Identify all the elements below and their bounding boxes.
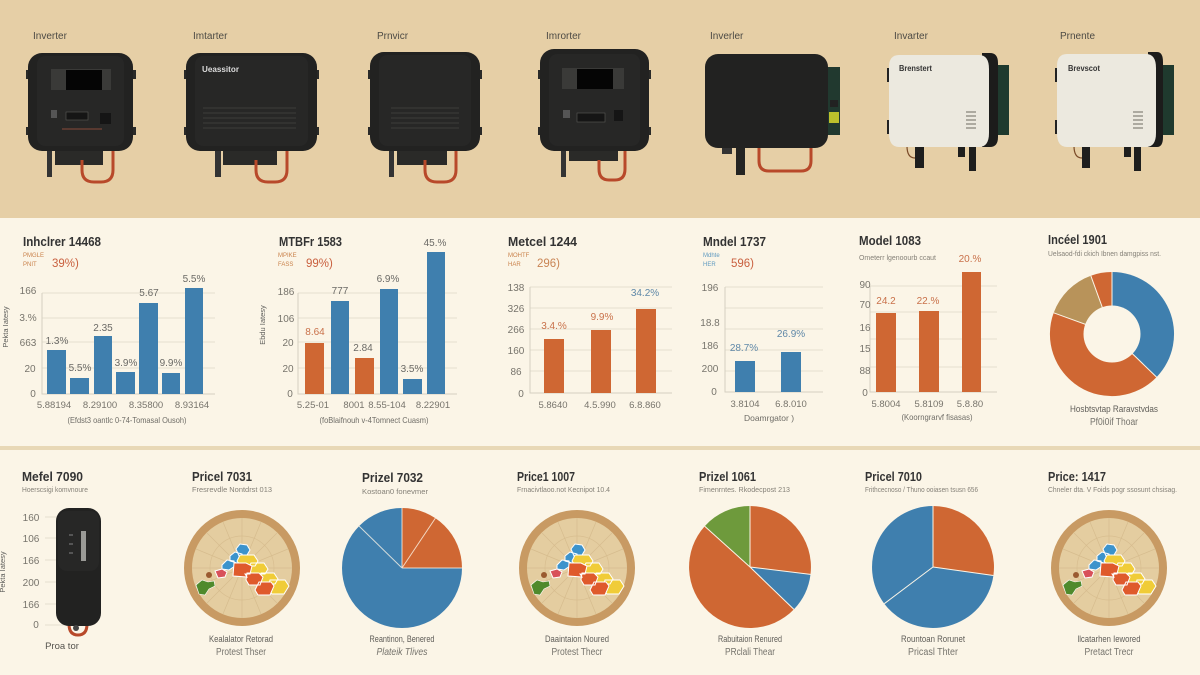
panel: bar chart 5: 22.% <box>917 296 940 307</box>
panel: bar chart 1: PNIT <box>23 262 37 268</box>
panel: bar chart 1: 2.35 <box>93 323 113 334</box>
panel title: Pricel 7031 <box>192 469 252 484</box>
panel: bar chart 3: 6.8.860 <box>629 400 661 411</box>
panel: dial chart 2 <box>517 469 631 658</box>
panel: donut chart: Hosbtsvtap Raravstvdas <box>1070 404 1158 414</box>
panel: bar chart 3: 266 <box>508 325 525 336</box>
panel: bar chart 2: 8.64 <box>305 327 325 338</box>
panel: bar chart 3: 9.9% <box>591 312 614 323</box>
panel: bar chart 2: Ebdu Iatesy <box>258 305 267 345</box>
panel: bar chart 3: 160 <box>508 346 525 357</box>
panel: bar chart 2: 106 <box>278 314 295 325</box>
panel: device gauge: 160 <box>23 513 40 524</box>
panel: pie chart 1: Plateik Tlives <box>376 647 428 658</box>
panel: bar chart 4: 26.9% <box>777 329 805 340</box>
panel subtitle: Chneler dta. V Foids pogr ssosunt chsisag. <box>1048 485 1177 494</box>
product: inverter 5 <box>705 31 840 175</box>
panel: bar chart 3 <box>508 234 672 411</box>
highlight value: 596) <box>731 258 754 270</box>
panel: bar chart 5: 5.8.80 <box>957 399 983 410</box>
panel: bar chart 2: 5.25-01 <box>297 400 329 411</box>
panel: pie chart 2: PRclali Thear <box>725 647 776 658</box>
donut segments <box>1050 272 1174 396</box>
chart subtitle: Uelsaod-fdi ckich Ibnen damgpiss nst. <box>1048 249 1161 258</box>
panel: bar chart 1: 9.9% <box>160 358 183 369</box>
highlight value: 296) <box>537 258 560 270</box>
panel: bar chart 3: 3.4.% <box>541 321 567 332</box>
panel: bar chart 1: 8.35800 <box>129 400 163 411</box>
product label: Prnvicr <box>377 31 409 42</box>
pie segments <box>689 506 811 628</box>
panel: pie chart 2: Rabuitaion Renured <box>718 634 782 644</box>
pie segments <box>342 508 462 628</box>
panel: dial chart 3: llcatarhen Iewored <box>1078 634 1140 644</box>
panel: pie chart 1 <box>342 470 462 658</box>
product label: Prnente <box>1060 31 1095 42</box>
panel: bar chart 5 <box>859 233 997 422</box>
panel: bar chart 1: 3.9% <box>115 358 138 369</box>
panel: donut chart <box>1048 232 1174 428</box>
panel: pie chart 3 <box>865 469 994 658</box>
panel: bar chart 5: (Koorngrarvf fisasas) <box>902 412 973 422</box>
panel: pie chart 2 <box>689 469 811 658</box>
panel: bar chart 3: HAR <box>508 262 521 268</box>
panel: bar chart 1: 5.5% <box>69 363 92 374</box>
chart title: Metcel 1244 <box>508 234 578 249</box>
panel: bar chart 4: 196 <box>702 283 719 294</box>
panel subtitle: Hoerscsigi komvnoure <box>22 485 88 494</box>
panel: bar chart 2: 186 <box>278 287 295 298</box>
panel: bar chart 5: 70 <box>859 300 871 311</box>
panel title: Prizel 1061 <box>699 469 756 484</box>
product label: Imtarter <box>193 31 228 42</box>
panel: device gauge: 166 <box>23 600 40 611</box>
panel: device gauge: 106 <box>23 534 40 545</box>
panel: dial chart 3: Pretact Trecr <box>1084 647 1134 658</box>
small legend: Mdhte <box>703 253 720 259</box>
product: inverter 6: Brenstert <box>899 64 932 73</box>
panel subtitle: Fresrevdle Nontdrst 013 <box>192 485 272 494</box>
panel: device gauge: Proa tor <box>45 641 79 652</box>
panel subtitle: Fimenrntes. Rkodecpost 213 <box>699 485 790 494</box>
chart title: Mndel 1737 <box>703 234 766 249</box>
product label: Inverter <box>33 31 68 42</box>
panel subtitle: Frnacivtlaoo.not Kecnipot 10.4 <box>517 485 610 494</box>
panel: bar chart 1: Pekta Iatesy <box>1 306 10 348</box>
product label: Invarter <box>894 31 929 42</box>
panel: bar chart 1: 8.93164 <box>175 400 209 411</box>
panel: bar chart 2: 45.% <box>424 238 447 249</box>
product: inverter 4 <box>538 31 651 180</box>
panel: dial chart 3 <box>1048 469 1177 658</box>
panel: bar chart 4: 0 <box>711 387 717 398</box>
panel: bar chart 1: 8.29100 <box>83 400 117 411</box>
small legend: MOHTF <box>508 253 530 259</box>
panel: bar chart 1: 1.3% <box>46 336 69 347</box>
chart title: Model 1083 <box>859 233 921 248</box>
highlight value: 99%) <box>306 258 333 270</box>
product label: Imrorter <box>546 31 582 42</box>
panel title: Pricel 7010 <box>865 469 922 484</box>
panel: bar chart 3: 5.8640 <box>538 400 568 411</box>
panel: device gauge <box>0 469 101 652</box>
panel: bar chart 4: Doamrgator ) <box>744 413 794 423</box>
highlight value: 39%) <box>52 258 79 270</box>
icon: radial mosaic <box>188 514 296 622</box>
panel: bar chart 5: 20.% <box>959 254 982 265</box>
panel: bar chart 1: 5.88194 <box>37 400 71 411</box>
chart title: Inhclrer 14468 <box>23 234 101 249</box>
panel: bar chart 2: 20 <box>282 338 294 349</box>
panel: bar chart 3: 86 <box>510 367 522 378</box>
panel: bar chart 2: 20 <box>282 364 294 375</box>
panel title: Price: 1417 <box>1048 469 1106 484</box>
panel: bar chart 3: 4.5.990 <box>584 400 616 411</box>
chart title: Incéel 1901 <box>1048 232 1107 247</box>
panel: bar chart 5: 88 <box>859 366 871 377</box>
product: inverter 7: Brevscot <box>1068 64 1100 73</box>
product: inverter 7 <box>1055 31 1174 171</box>
panel title: Prizel 7032 <box>362 470 423 485</box>
panel title: Mefel 7090 <box>22 469 83 484</box>
panel: bar chart 1: 5.67 <box>139 288 159 299</box>
panel: bar chart 1: (Efdst3 oantlc 0-74-Tomasal Ousoh) <box>68 415 187 425</box>
panel: bar chart 1: 5.5% <box>183 274 206 285</box>
panel: bar chart 2: 8.55-104 <box>368 400 406 411</box>
panel: bar chart 4: 200 <box>702 364 719 375</box>
product: inverter 2 <box>184 31 319 182</box>
panel: bar chart 2: (foBlaifnouh v-4Tomnect Cuasm) <box>320 415 429 425</box>
panel: pie chart 3: Rountoan Rorunet <box>901 634 965 644</box>
panel: donut chart: Pf0i0if Thoar <box>1090 417 1139 428</box>
panel: bar chart 4: 3.8104 <box>730 399 760 410</box>
panel: bar chart 3: 34.2% <box>631 288 659 299</box>
product label: Inverler <box>710 31 744 42</box>
panel: bar chart 4 <box>700 234 823 423</box>
pie segments <box>872 506 994 628</box>
panel: bar chart 5: 0 <box>862 388 868 399</box>
top product band <box>0 0 1200 218</box>
panel: bar chart 4: 18.8 <box>700 318 720 329</box>
panel: bar chart 1: 663 <box>20 338 37 349</box>
panel: dial chart 1: Protest Thser <box>216 647 267 658</box>
chart title: MTBFr 1583 <box>279 234 342 249</box>
panel title: Price1 1007 <box>517 469 575 484</box>
chart subtitle: Ometerr lgenoourb ccaut <box>859 253 937 262</box>
icon: portable device <box>56 508 101 635</box>
panel: dial chart 2: Protest Thecr <box>552 647 603 658</box>
panel: bar chart 5: 24.2 <box>876 296 896 307</box>
panel: bar chart 5: 90 <box>859 280 871 291</box>
small legend: PMGLE <box>23 253 44 259</box>
panel: bar chart 1 <box>1 234 215 425</box>
panel: bar chart 4: HER <box>703 262 716 268</box>
small legend: MPIKE <box>278 253 297 259</box>
panel: bar chart 2: 3.5% <box>401 364 424 375</box>
product: inverter 2: Ueassitor <box>202 65 239 74</box>
panel: bar chart 5: 5.8109 <box>914 399 944 410</box>
panel: bar chart 4: 28.7% <box>730 343 758 354</box>
panel: device gauge: 200 <box>23 578 40 589</box>
panel: bar chart 2: 0 <box>287 389 293 400</box>
icon: radial mosaic <box>523 514 631 622</box>
panel: bar chart 5: 5.8004 <box>871 399 901 410</box>
panel: bar chart 1: 20 <box>24 364 36 375</box>
panel: bar chart 2: FASS <box>278 262 293 268</box>
panel: pie chart 1: Reantinon, Benered <box>370 634 434 644</box>
panel: bar chart 2: 6.9% <box>377 274 400 285</box>
panel: bar chart 1: 0 <box>30 389 36 400</box>
panel subtitle: Kostoan0 fonevmer <box>362 487 429 496</box>
panel: bar chart 2: 8.22901 <box>416 400 450 411</box>
icon: radial mosaic <box>1055 514 1163 622</box>
panel: bar chart 2 <box>258 234 457 425</box>
panel: pie chart 3: Pricasl Thter <box>908 647 959 658</box>
panel: bar chart 2: 777 <box>332 286 349 297</box>
panel subtitle: Frithcecnoso / Thuno ooiasen tsusn 656 <box>865 485 978 494</box>
product: inverter 6 <box>887 31 1009 171</box>
panel: bar chart 5: 15 <box>859 344 871 355</box>
panel: bar chart 5: 16 <box>859 323 871 334</box>
panel: bar chart 2: 2.84 <box>353 343 373 354</box>
panel: bar chart 4: 186 <box>702 341 719 352</box>
panel: bar chart 2: 8001 <box>343 400 365 411</box>
panel: bar chart 3: 326 <box>508 304 525 315</box>
product: inverter 3 <box>368 31 482 182</box>
panel: device gauge: 0 <box>33 620 39 631</box>
panel: dial chart 2: Daaintaion Noured <box>545 634 609 644</box>
panel: bar chart 4: 6.8.010 <box>775 399 807 410</box>
panel: device gauge: 166 <box>23 556 40 567</box>
panel: bar chart 3: 138 <box>508 283 525 294</box>
panel: dial chart 1: Kealalator Retorad <box>209 634 273 644</box>
product: inverter 1 <box>26 31 136 182</box>
panel: bar chart 1: 3.% <box>19 313 37 324</box>
section divider <box>0 446 1200 450</box>
panel: bar chart 3: 0 <box>518 389 524 400</box>
panel: dial chart 1 <box>188 469 296 658</box>
panel: bar chart 1: 166 <box>20 286 37 297</box>
